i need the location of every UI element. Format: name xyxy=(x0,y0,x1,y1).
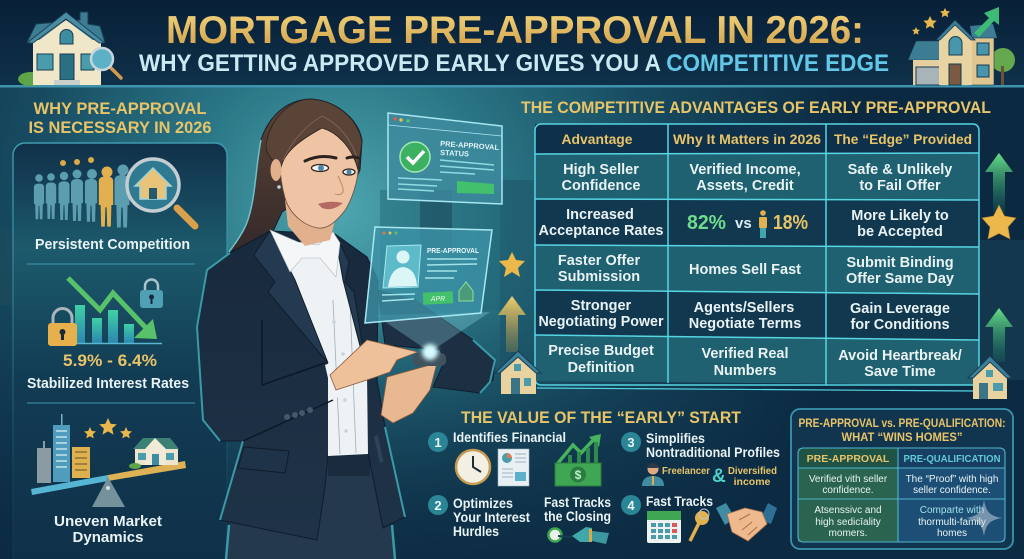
icon: closing gauge and hand xyxy=(548,527,609,544)
icon: money and growth xyxy=(555,434,601,486)
item 3: simplifies nontraditional profiles xyxy=(621,430,780,488)
row: precise budget definition: Numbers xyxy=(714,363,776,379)
item 4: fast tracks: Fast Tracks xyxy=(646,493,713,509)
right lapel xyxy=(335,234,367,373)
row: stronger negotiating power: Gain Leverage xyxy=(850,301,950,317)
row: increased acceptance rates: 82% xyxy=(687,212,726,234)
screen: pre-approval profile: APR xyxy=(430,296,445,303)
row: stronger negotiating power xyxy=(538,298,950,333)
row: high seller confidence: Safe & Unlikely xyxy=(848,162,952,178)
row: faster offer submission xyxy=(558,253,954,287)
icon: house right xyxy=(968,356,1012,399)
item 3: simplifies nontraditional profiles: Diversified xyxy=(728,465,777,477)
table header row: Why It Matters in 2026 xyxy=(673,131,821,147)
item 2: optimizes interest hurdles xyxy=(428,495,530,539)
icon: freelancer xyxy=(642,463,664,486)
item 3: simplifies nontraditional profiles: 3 xyxy=(627,435,635,450)
icon: money and growth: $ xyxy=(575,468,582,482)
icon: seesaw with buildings and house xyxy=(31,414,186,507)
icon: crowd and magnifier xyxy=(34,157,195,228)
row: faster offer submission: Faster Offer xyxy=(558,253,640,269)
screen: pre-approval status xyxy=(388,113,502,204)
icon: calendar xyxy=(647,511,681,543)
icon: house with magnifier xyxy=(18,12,121,86)
column: pre-qualification: homes xyxy=(937,528,967,539)
column: pre-approval: momers. xyxy=(829,528,867,539)
item 2: optimizes interest hurdles: 2 xyxy=(434,498,442,513)
screen: pre-approval status: PRE-APPROVAL xyxy=(440,139,500,152)
pocket xyxy=(238,447,289,473)
icon: interest rate chart xyxy=(48,278,163,346)
row: faster offer submission: Submission xyxy=(558,269,640,285)
icon: report xyxy=(498,449,529,486)
item 3: simplifies nontraditional profiles: income xyxy=(734,476,771,488)
item: fast tracks the closing: Fast Tracks xyxy=(544,494,611,510)
panel title xyxy=(798,418,1006,444)
row: increased acceptance rates: vs xyxy=(735,215,752,232)
panel: why pre-approval xyxy=(13,143,227,559)
row: increased acceptance rates: Acceptance Rates xyxy=(539,223,663,239)
caption: persistent competition: Persistent Competition xyxy=(35,236,190,253)
icon: sparkle xyxy=(966,500,1002,536)
column: pre-qualification: PRE-QUALIFICATION xyxy=(904,453,1000,465)
panel title: WHAT “WINS HOMES” xyxy=(842,432,962,444)
row: precise budget definition: Definition xyxy=(568,360,634,376)
collar xyxy=(270,230,340,277)
screen: pre-approval profile: PRE-APPROVAL xyxy=(427,246,479,255)
column: pre-approval: PRE-APPROVAL xyxy=(807,453,890,465)
item: fast tracks the closing xyxy=(544,494,611,544)
item 3: simplifies nontraditional profiles: & xyxy=(712,466,726,487)
row: increased acceptance rates: 18% xyxy=(773,212,808,234)
caption: uneven market dynamics: Uneven Market xyxy=(54,513,162,530)
table header row: The “Edge” Provided xyxy=(834,131,972,147)
column: pre-approval: high sedicīality xyxy=(815,517,881,528)
item 3: simplifies nontraditional profiles: Nontraditional Profiles xyxy=(646,444,780,460)
shirt xyxy=(272,232,368,456)
row: precise budget definition: Precise Budget xyxy=(548,343,654,359)
caption: uneven market dynamics: Dynamics xyxy=(72,529,144,546)
icon: green check xyxy=(400,142,430,172)
row: high seller confidence xyxy=(562,162,952,194)
neck xyxy=(285,200,335,246)
item 2: optimizes interest hurdles: Hurdles xyxy=(453,523,499,539)
face xyxy=(280,125,358,228)
holographic projection beam xyxy=(375,312,490,352)
item 2: optimizes interest hurdles: Your Interest xyxy=(453,509,530,525)
title: MORTGAGE PRE-APPROVAL IN 2026: xyxy=(166,9,864,52)
item 3: simplifies nontraditional profiles: Simplifies xyxy=(646,430,705,446)
row: stronger negotiating power: Negotiate Terms xyxy=(689,316,801,332)
left lapel xyxy=(254,231,328,363)
row: faster offer submission: Homes Sell Fast xyxy=(689,262,801,278)
column: pre-approval: confidence. xyxy=(822,485,874,496)
screen: pre-approval profile xyxy=(365,227,492,323)
row: stronger negotiating power: Agents/Sellers xyxy=(694,300,794,316)
heading: why pre-approval: IS NECESSARY IN 2026 xyxy=(28,119,212,137)
item 3: simplifies nontraditional profiles: Freelancer xyxy=(662,465,710,477)
arrow: green up right top xyxy=(985,153,1013,212)
jacket xyxy=(197,231,405,540)
row: stronger negotiating power: Stronger xyxy=(571,298,632,314)
stat: rate range: 5.9% - 6.4% xyxy=(63,351,157,370)
icon: gold star right xyxy=(982,205,1016,239)
item 4: fast tracks xyxy=(621,493,777,543)
table header row: Advantage xyxy=(562,131,633,147)
icon: house with stars and growth arrow xyxy=(908,7,1015,85)
watch glow xyxy=(422,344,438,360)
comparison table xyxy=(798,448,1005,542)
row: precise budget definition: Avoid Heartbreak/ xyxy=(838,348,962,364)
icon: house left xyxy=(495,351,541,394)
icon: gold star left xyxy=(499,252,525,277)
screen: pre-approval status: STATUS xyxy=(440,148,469,159)
lower hand xyxy=(381,363,437,423)
hair back xyxy=(229,99,362,252)
arrow: gold up left xyxy=(498,296,526,352)
illustration: businesswoman xyxy=(197,99,495,559)
panel: pre-approval vs pre-qualification xyxy=(791,409,1013,549)
arrow: green up right bottom xyxy=(985,308,1013,362)
subtitle: WHY GETTING APPROVED EARLY GIVES YOU A COMPETITIVE EDGE xyxy=(139,50,889,77)
right arm sleeve xyxy=(378,290,495,393)
row: faster offer submission: Submit Binding xyxy=(846,255,954,271)
row: faster offer submission: Offer Same Day xyxy=(846,271,954,287)
row: high seller confidence: Confidence xyxy=(562,178,640,194)
heading: why pre-approval: WHY PRE-APPROVAL xyxy=(34,100,206,118)
column: pre-qualification: Comparte with xyxy=(920,505,984,516)
item 1: identifies financial: 1 xyxy=(434,435,442,450)
row: precise budget definition xyxy=(548,343,962,380)
row: increased acceptance rates: Increased xyxy=(566,207,634,223)
column: pre-qualification xyxy=(904,453,1000,539)
row: precise budget definition: Verified Real xyxy=(701,346,789,362)
row: high seller confidence: Assets, Credit xyxy=(696,178,794,194)
row: precise budget definition: Save Time xyxy=(864,364,936,380)
header band xyxy=(0,0,1024,88)
left arm sleeve xyxy=(243,320,333,441)
column: pre-approval xyxy=(807,453,890,539)
column: pre-approval: Verified vith seller xyxy=(809,474,888,485)
item 1: identifies financial xyxy=(428,429,601,486)
row: high seller confidence: to Fail Offer xyxy=(859,178,941,194)
hair front xyxy=(266,99,362,170)
pointing hand xyxy=(330,340,418,390)
trousers xyxy=(226,452,395,559)
column: pre-qualification: seller confidence. xyxy=(913,485,991,496)
item: fast tracks the closing: the Closing xyxy=(544,508,611,524)
column: pre-approval: Atsenssivc and xyxy=(814,505,882,516)
icon: handshake xyxy=(716,503,777,541)
column: pre-qualification: The “Proof” with high xyxy=(906,474,998,485)
row: increased acceptance rates xyxy=(539,207,949,240)
caption: stabilized interest rates: Stabilized Interest Rates xyxy=(27,375,189,392)
row: stronger negotiating power: for Conditions xyxy=(850,317,950,333)
icon: key xyxy=(690,509,709,541)
item 4: fast tracks: 4 xyxy=(627,498,635,513)
row: increased acceptance rates: More Likely to xyxy=(851,208,949,224)
table: competitive advantages xyxy=(535,123,979,391)
row: stronger negotiating power: Negotiating Power xyxy=(538,314,664,330)
heading: value of early start: THE VALUE OF THE “EARLY” START xyxy=(461,408,742,427)
row: high seller confidence: High Seller xyxy=(563,162,639,178)
row: increased acceptance rates: be Accepted xyxy=(857,224,943,240)
row: high seller confidence: Verified Income, xyxy=(689,162,801,178)
item 1: identifies financial: Identifies Financial xyxy=(453,429,566,445)
watch xyxy=(413,353,446,366)
heading: competitive advantages: THE COMPETITIVE ADVANTAGES OF EARLY PRE-APPROVAL xyxy=(521,99,991,117)
icon: clock xyxy=(456,450,490,484)
table header row xyxy=(562,131,972,147)
caption: uneven market dynamics xyxy=(54,513,162,546)
item 2: optimizes interest hurdles: Optimizes xyxy=(453,495,513,511)
column: pre-qualification: thormulti-family xyxy=(918,517,986,528)
heading: why pre-approval xyxy=(28,100,212,137)
